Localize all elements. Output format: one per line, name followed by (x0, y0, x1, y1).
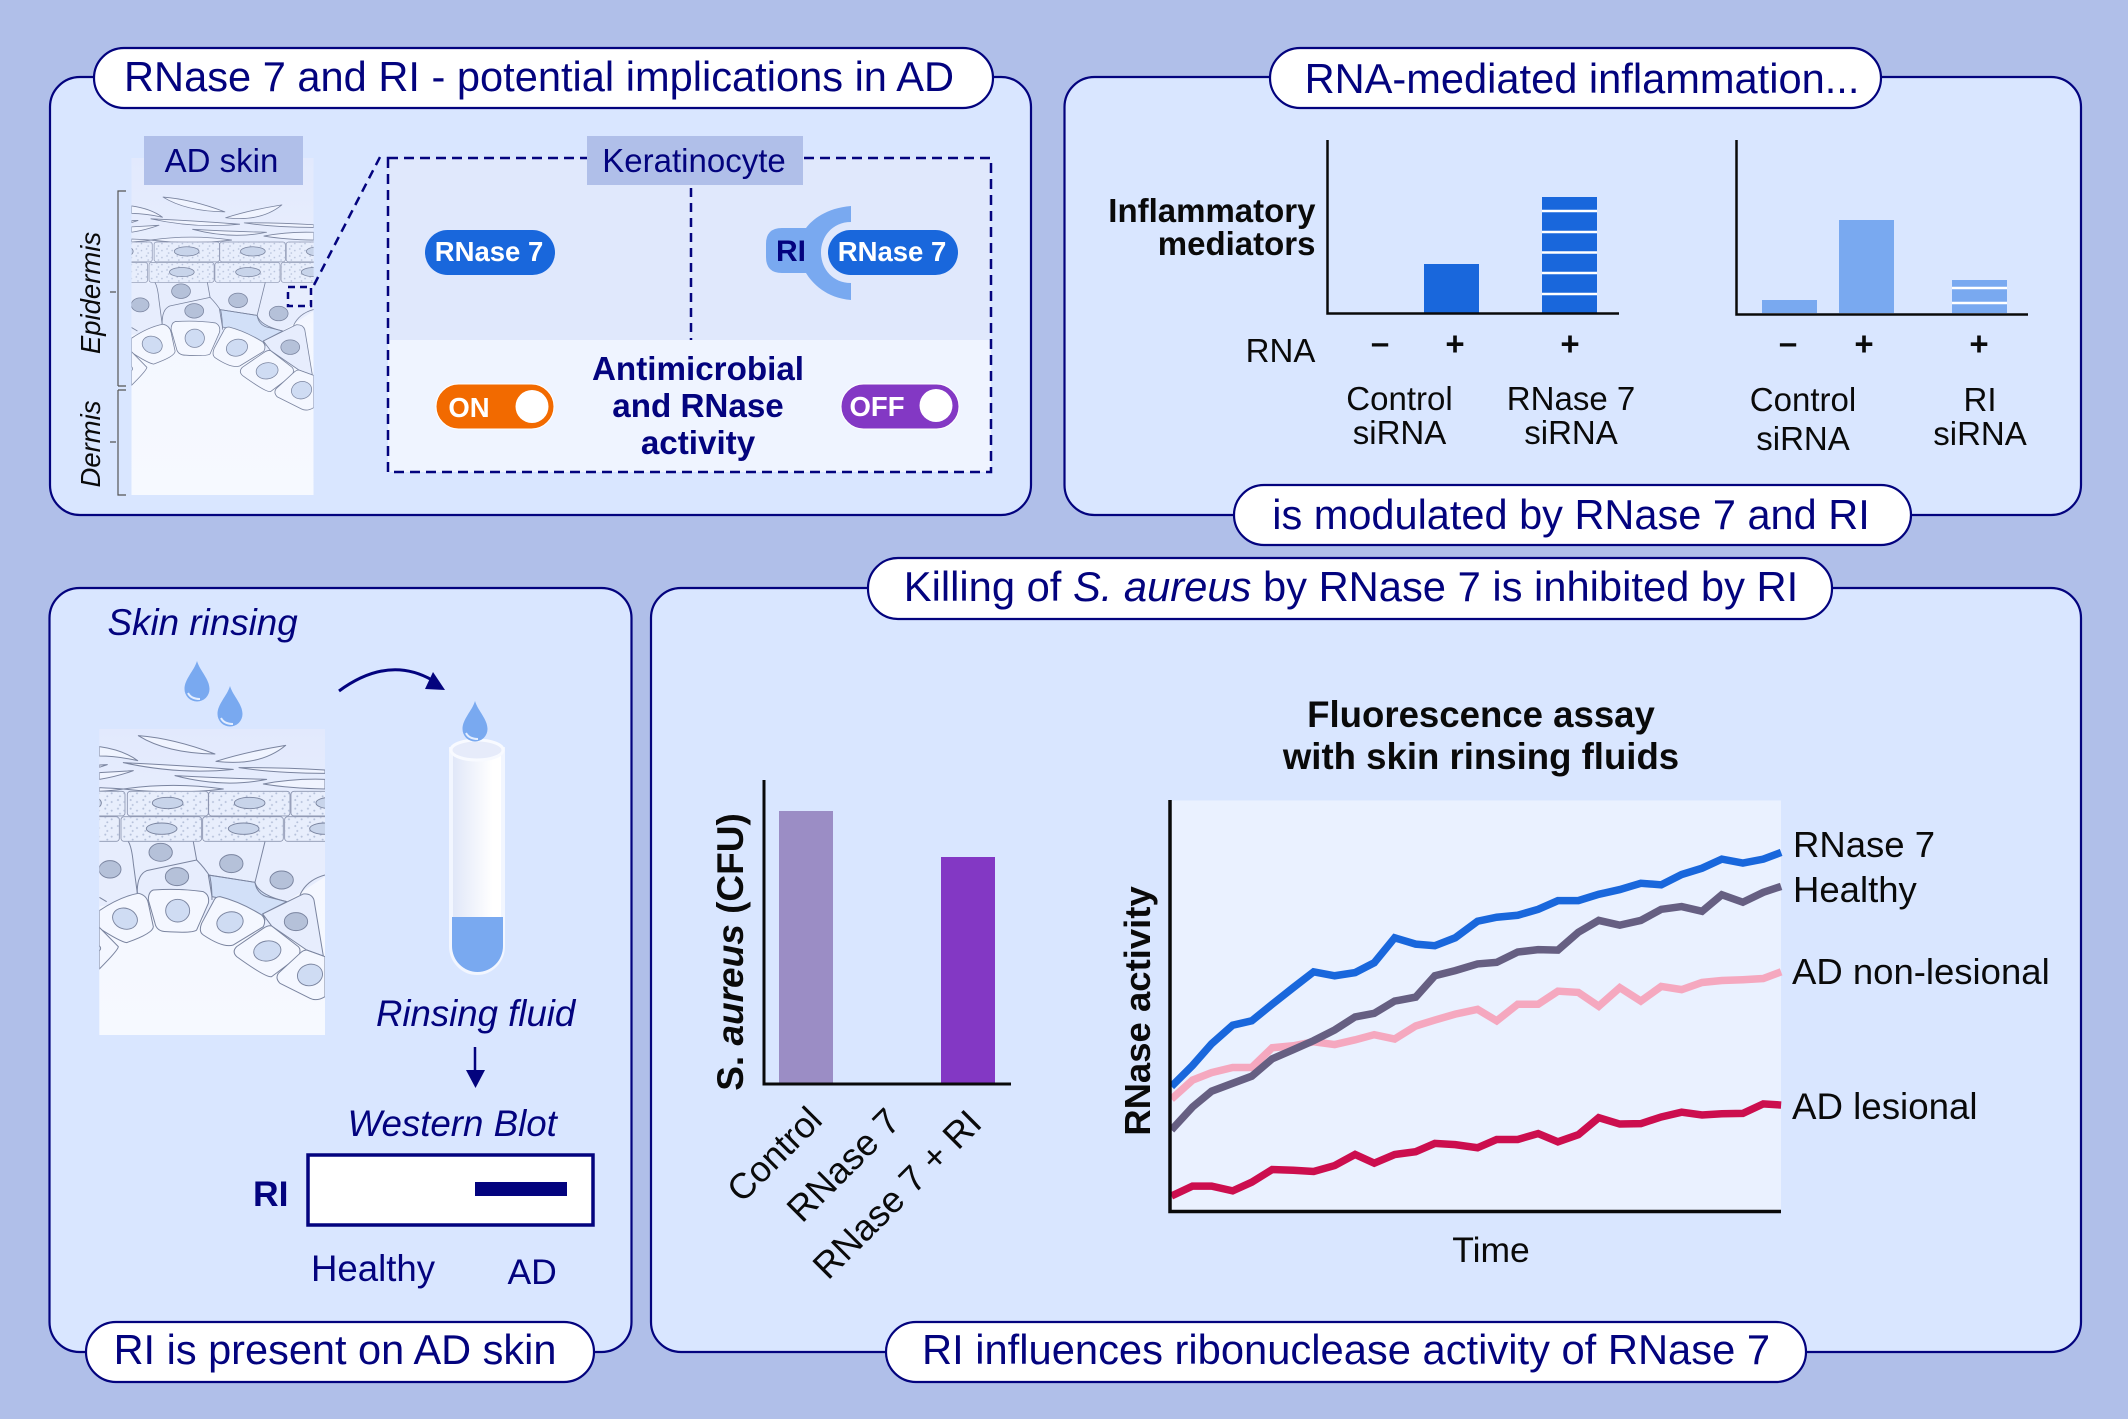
label: inflammatory mediators: Inflammatory (1108, 192, 1316, 229)
text: antimicrobial and RNase activity: and RNase (612, 388, 784, 425)
labels: siRNA conditions (1346, 380, 2027, 457)
label: epidermis and dermis brackets (75, 191, 126, 495)
diagram: keratinocyte box (388, 136, 991, 472)
label: rinsing fluid: Rinsing fluid (376, 993, 577, 1034)
bar chart: RNase 7 siRNA (1328, 140, 1619, 314)
axis labels: RNA plus and minus: + (1969, 325, 1989, 362)
line: AD non-lesional (1171, 972, 1781, 1099)
toggle: OFF: OFF (850, 391, 904, 422)
heading: fluorescence assay: with skin rinsing fluids (1282, 736, 1679, 777)
bar chart: RI siRNA (1736, 140, 2028, 314)
western blot (253, 1155, 593, 1292)
pill: RNase 7 free: RNase 7 (435, 236, 543, 267)
panel: killing of S. aureus and ribonuclease activity (651, 558, 2081, 1382)
panel: RNA-mediated inflammation (1064, 48, 2081, 545)
pill: RNase 7 free (425, 230, 555, 275)
line chart: RNase activity over time: Healthy (1793, 869, 1918, 910)
axis labels: RNA plus and minus: – (1779, 324, 1797, 361)
axis labels: RNA plus and minus: – (1371, 324, 1389, 361)
labels: siRNA conditions: siRNA (1756, 420, 1850, 457)
heading: RNase 7 and RI potential implications in AD: RNase 7 and RI - potential implications in AD (124, 53, 954, 100)
labels: siRNA conditions: Control (1750, 381, 1856, 418)
arrow: down to western blot (466, 1047, 485, 1088)
heading: fluorescence assay: Fluorescence assay (1307, 694, 1656, 735)
toggle: ON (436, 384, 554, 429)
bar chart: S. aureus CFU: RNase 7 (779, 1100, 908, 1230)
line: Healthy (1171, 886, 1781, 1130)
axis labels: RNA plus and minus: RNA (1246, 332, 1315, 369)
panel: RNase 7 and RI potential implications (50, 48, 1031, 515)
axis labels: RNA plus and minus: + (1560, 325, 1580, 362)
heading: is modulated by RNase 7 and RI: is modulated by RNase 7 and RI (1272, 491, 1870, 538)
line chart: RNase activity over time: RNase 7 (1793, 824, 1935, 865)
label: epidermis and dermis brackets: Dermis (75, 400, 106, 488)
line chart: RNase activity over time: RNase activity (1117, 886, 1158, 1136)
western blot: RI (253, 1174, 288, 1214)
icon: test tube with rinsing fluid (451, 701, 503, 973)
line chart: RNase activity over time (1117, 800, 2050, 1270)
line chart: RNase activity over time: Time (1452, 1230, 1530, 1270)
line: RNase 7 (1171, 852, 1781, 1086)
label: inflammatory mediators (1108, 192, 1316, 262)
label: western blot: Western Blot (348, 1103, 559, 1144)
axis labels: RNA plus and minus: + (1854, 325, 1874, 362)
bar chart: S. aureus CFU (710, 780, 1011, 1287)
illustration: AD skin cross-section: AD skin (165, 142, 278, 179)
icon: water drops (184, 661, 242, 726)
text: antimicrobial and RNase activity: Antimicrobial (592, 351, 804, 388)
panel: RI is present on AD skin (50, 588, 632, 1382)
heading: RI is present on AD skin: RI is present on AD skin (114, 1326, 556, 1373)
labels: siRNA conditions: RNase 7 (1507, 380, 1635, 417)
illustration: skin section (83, 729, 345, 1035)
diagram: keratinocyte box: Keratinocyte (602, 142, 786, 179)
heading: RI is present on AD skin (86, 1322, 594, 1382)
heading: fluorescence assay (1282, 694, 1679, 777)
heading: is modulated by RNase 7 and RI (1234, 485, 1911, 545)
bar chart: S. aureus CFU: RNase 7 + RI (805, 1102, 989, 1287)
toggle: ON: ON (448, 392, 490, 423)
toggle: OFF (841, 384, 959, 429)
heading: RI influences ribonuclease activity: RI influences ribonuclease activity of RNase 7 (922, 1326, 1770, 1373)
line chart: RNase activity over time: AD non-lesional (1792, 951, 2050, 992)
illustration: AD skin cross-section (119, 136, 380, 495)
line chart: RNase activity over time: AD lesional (1792, 1086, 1978, 1127)
label: skin rinsing: Skin rinsing (108, 602, 298, 643)
western blot: AD (508, 1252, 557, 1292)
icon: RI bound to RNase 7: RNase 7 (838, 236, 946, 267)
bar chart: S. aureus CFU: S. aureus (CFU) (710, 813, 751, 1091)
arrow: skin to tube (339, 670, 445, 691)
heading: RNA-mediated inflammation: RNA-mediated inflammation... (1305, 55, 1859, 102)
label: epidermis and dermis brackets: Epidermis (75, 232, 106, 354)
text: antimicrobial and RNase activity (592, 351, 804, 462)
axis labels: RNA plus and minus (1246, 324, 1989, 369)
axis labels: RNA plus and minus: + (1445, 325, 1465, 362)
label: inflammatory mediators: mediators (1158, 225, 1316, 262)
icon: RI bound to RNase 7 (766, 206, 958, 300)
text: antimicrobial and RNase activity: activity (641, 425, 756, 462)
bar chart: S. aureus CFU: Control (719, 1099, 830, 1210)
icon: RI bound to RNase 7: RI (776, 235, 806, 268)
heading: killing of S. aureus: Killing of S. aureus by RNase 7 is inhibited by RI (904, 563, 1798, 610)
labels: siRNA conditions: siRNA (1524, 414, 1618, 451)
labels: siRNA conditions: RI (1964, 381, 1996, 418)
western blot: Healthy (311, 1248, 436, 1289)
labels: siRNA conditions: siRNA (1933, 415, 2027, 452)
labels: siRNA conditions: siRNA (1353, 414, 1446, 451)
labels: siRNA conditions: Control (1346, 380, 1453, 417)
line: AD lesional (1171, 1104, 1781, 1196)
